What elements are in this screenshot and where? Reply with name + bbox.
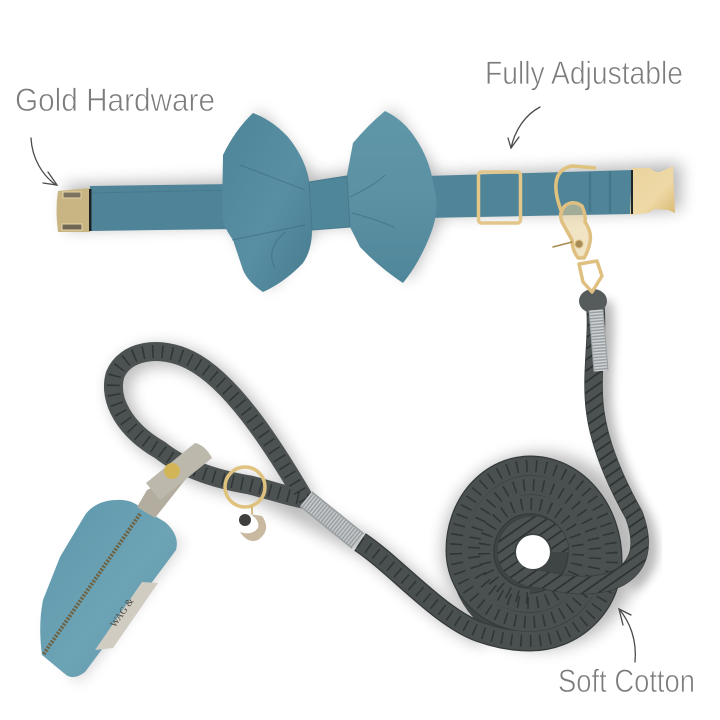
collar band right (425, 170, 632, 218)
snap button (164, 463, 180, 479)
poop bag pouch (40, 500, 177, 677)
label: Soft Cotton: Soft Cotton (558, 663, 695, 699)
left gold buckle (56, 188, 92, 232)
coil (360, 461, 617, 645)
silver wrap upper (596, 310, 601, 371)
rope end at clip (579, 289, 607, 313)
zipper (43, 514, 140, 655)
arrow: to rope coil (619, 609, 635, 662)
D ring (556, 166, 596, 213)
right gold buckle (630, 166, 675, 215)
ring and charm (225, 467, 266, 541)
arrow: to slider (508, 107, 540, 148)
swivel clip (553, 203, 602, 292)
collar with bow (56, 111, 675, 292)
label: Fully Adjustable: Fully Adjustable (485, 55, 683, 91)
bow left wing (222, 113, 312, 292)
collar band left (90, 184, 235, 231)
bow right wing (347, 111, 436, 283)
slider buckle (478, 172, 520, 223)
strap with snap (137, 443, 212, 518)
pouch label: WAG & (108, 596, 137, 630)
long rope from clip into coil (506, 296, 640, 585)
handle loop (113, 352, 308, 500)
bow knot (309, 176, 350, 230)
label: Gold Hardware: Gold Hardware (15, 82, 215, 118)
leash rope (113, 289, 640, 645)
arrow: to gold buckle (31, 138, 57, 185)
soft drop shadows (47, 108, 681, 683)
rope centre hole (516, 535, 550, 569)
pouch label (95, 582, 158, 650)
silver wrap lower (306, 499, 358, 541)
